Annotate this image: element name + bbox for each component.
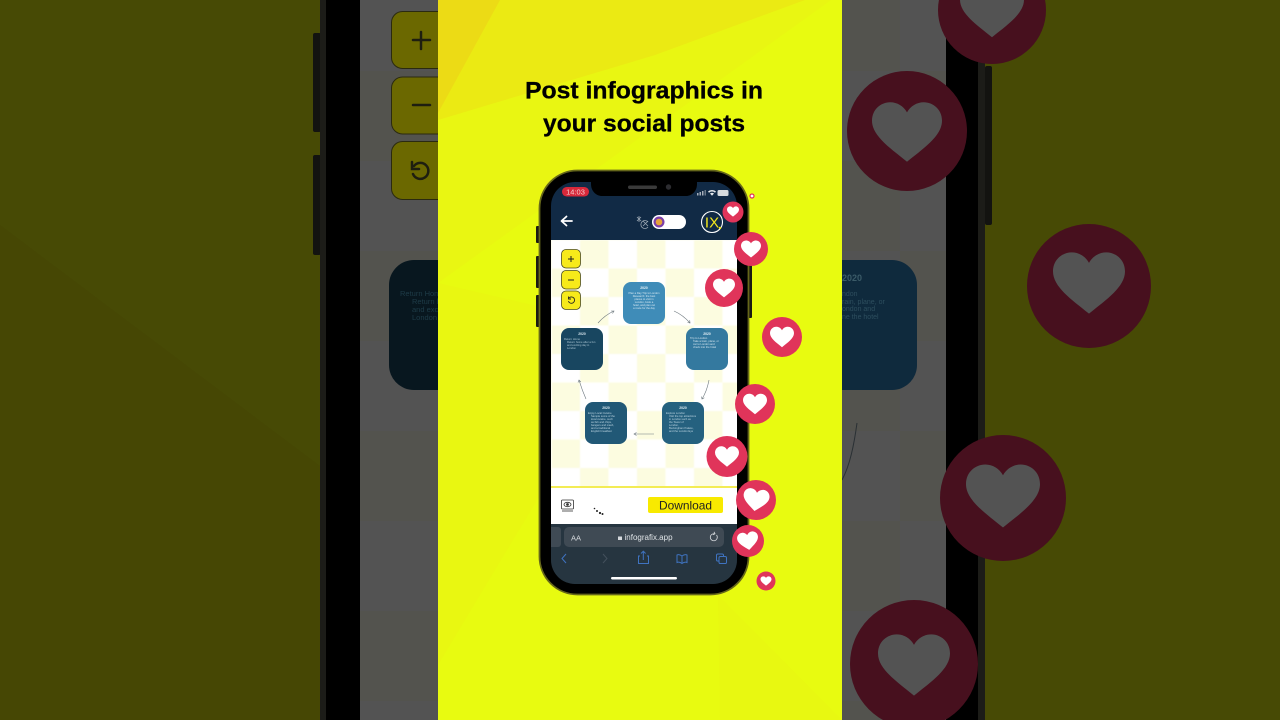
dimmed card left: London	[412, 313, 437, 322]
card: trip to london: Take a train, plane, or	[693, 339, 719, 343]
card: plan a day trip: Research: the best	[633, 294, 656, 298]
card: return home: Return Home	[564, 337, 580, 341]
card: plan a day trip	[623, 282, 665, 324]
phone screen	[545, 182, 743, 584]
dimmed card left: Return Home	[400, 289, 445, 298]
phone body	[540, 170, 748, 594]
card: enjoy local cuisine: and a traditional	[591, 426, 611, 430]
card: enjoy local cuisine: 2020	[602, 406, 610, 410]
canvas checker background	[551, 240, 737, 486]
IX logo: IX	[705, 214, 719, 232]
dimmed card right: rain, plane, or	[842, 299, 885, 306]
heart 2	[734, 232, 768, 266]
dimmed card left: and exciting	[412, 305, 452, 314]
card: enjoy local cuisine: bangers and mash,	[591, 423, 614, 427]
card: plan a day trip: Plan a Day Trip to London	[628, 291, 660, 295]
heart 5	[735, 384, 775, 424]
dimmed phone bezel left	[320, 0, 360, 720]
card: plan a day trip: a route for the day	[633, 306, 656, 310]
zoom out button	[562, 270, 580, 289]
card: explore london: and the London Eye	[669, 429, 694, 433]
heart 4	[762, 317, 802, 357]
card: plan a day trip: London, book a	[635, 300, 654, 304]
dimmed card left: Return home	[412, 297, 455, 306]
browser bar	[551, 524, 737, 584]
heart 8	[732, 525, 764, 557]
dimmed heart 4	[940, 435, 1066, 561]
dimmed phone volume buttons	[313, 33, 321, 255]
dimmed app canvas right	[842, 0, 946, 720]
night mode stars icon	[637, 216, 648, 228]
dimmed heart 2	[847, 71, 967, 191]
arrow: trip to explore	[702, 380, 709, 399]
browser tab stub	[551, 527, 561, 547]
dimmed card right	[800, 260, 917, 390]
browser url bar: AA	[571, 534, 581, 542]
card: trip to london: check into the hotel	[693, 345, 717, 349]
phone	[536, 170, 752, 594]
heart 7	[736, 480, 776, 520]
dimmed card right: ndon	[842, 291, 858, 298]
title: Post infographics in	[525, 78, 763, 104]
card: enjoy local cuisine: as fish and chips,	[591, 420, 612, 424]
card: trip to london: car to London and	[693, 342, 715, 346]
dimmed app canvas left	[360, 0, 438, 720]
dimmed heart 5	[850, 600, 978, 720]
central yellow panel	[438, 0, 842, 720]
dimmed card right: ondon and	[842, 306, 875, 313]
back arrow icon	[562, 216, 572, 226]
IX logo	[702, 212, 722, 232]
dimmed background: left side	[0, 0, 469, 720]
card: enjoy local cuisine: Enjoy Local Cuisine	[588, 411, 612, 415]
download button: Download	[659, 498, 712, 512]
home indicator	[611, 577, 677, 580]
title	[525, 78, 763, 138]
card: explore london: Buckingham Palace,	[669, 426, 694, 430]
arrow: return to plan	[598, 311, 614, 323]
card: explore london: 2020	[679, 406, 687, 410]
arrow: plan to trip	[674, 311, 690, 323]
reset button	[562, 291, 580, 310]
card: enjoy local cuisine	[585, 402, 627, 444]
title: your social posts	[543, 110, 745, 138]
dimmed zoom buttons	[392, 12, 462, 200]
card: return home: London	[567, 346, 576, 350]
preview eye icon	[562, 500, 574, 511]
card: return home: Return home after a fun	[567, 340, 596, 344]
card: plan a day trip: places to visit in	[635, 297, 654, 301]
card: explore london: Visit the top attractions	[669, 414, 697, 418]
browser url bar	[564, 527, 724, 547]
canvas bottom line	[551, 486, 737, 488]
card: return home	[561, 328, 603, 370]
card: return home: and exciting day in	[567, 343, 590, 347]
dimmed heart 1	[938, 0, 1046, 64]
loading dots	[594, 508, 604, 515]
card: return home: 2020	[578, 332, 586, 336]
card: enjoy local cuisine: local cuisine, such	[591, 417, 613, 421]
card: plan a day trip: hotel, and plan out	[633, 303, 655, 307]
dimmed background: right side	[800, 0, 1280, 720]
notch	[591, 181, 697, 196]
card: explore london: in London such as	[669, 417, 691, 421]
zoom in button	[562, 250, 580, 268]
heart 1	[722, 202, 744, 222]
theme toggle	[652, 215, 686, 229]
card: plan a day trip: 2020	[640, 286, 648, 290]
card: trip to london: 2020	[703, 332, 711, 336]
card: explore london	[662, 402, 704, 444]
heart 3	[705, 269, 743, 307]
card: enjoy local cuisine: Sample some of the	[591, 414, 615, 418]
dimmed heart 3	[1027, 224, 1151, 348]
status time pill: 14:03	[566, 188, 585, 196]
status icons	[697, 190, 728, 196]
heart 9	[756, 572, 776, 590]
dimmed phone bezel right	[946, 0, 992, 720]
download button	[648, 497, 723, 513]
card: explore london: Explore London	[666, 411, 685, 415]
bottom action bar	[551, 488, 737, 524]
heart 6	[706, 436, 748, 477]
status time pill	[562, 187, 589, 196]
dimmed card left	[389, 260, 469, 390]
dimmed arrow	[842, 423, 857, 480]
dimmed card right: 2020	[842, 273, 862, 283]
arrow: cuisine to return	[578, 380, 586, 399]
card: explore london: the Tower of	[669, 420, 684, 424]
browser navigation icons	[562, 551, 726, 564]
card: trip to london	[686, 328, 728, 370]
phone side buttons	[536, 226, 752, 327]
dimmed button symbols	[412, 32, 430, 179]
dimmed card right: ne the hotel	[842, 314, 879, 321]
app header	[551, 182, 737, 240]
floating hearts	[705, 194, 802, 590]
card: trip to london: Trip to London	[690, 336, 708, 340]
small ring	[750, 194, 754, 198]
browser url bar: infografix.app	[624, 533, 673, 542]
card: explore london: London,	[669, 423, 679, 427]
card: enjoy local cuisine: English breakfast	[591, 429, 612, 433]
arrow: explore to cuisine	[634, 432, 654, 436]
